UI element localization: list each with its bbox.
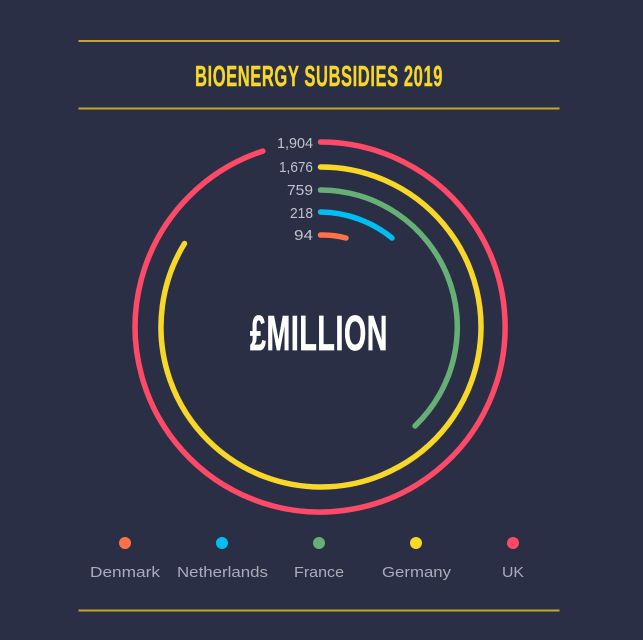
arc: Germany <box>161 167 481 487</box>
legend item: France <box>294 537 344 581</box>
arc: UK <box>135 142 505 512</box>
arc: Netherlands <box>320 212 392 238</box>
legend item: Germany <box>382 537 452 581</box>
value: Netherlands: 218 <box>290 205 313 222</box>
legend item: UK: UK <box>502 564 524 581</box>
value: Germany: 1,676 <box>279 159 313 176</box>
arc: France <box>320 190 457 426</box>
legend item: Netherlands <box>177 537 268 581</box>
legend item: Denmark: Denmark <box>90 564 161 581</box>
legend item: France: France <box>294 564 344 581</box>
title: BIOENERGY SUBSIDIES 2019 <box>195 61 443 93</box>
legend item: Netherlands: Netherlands <box>177 564 268 581</box>
value: UK: 1,904 <box>277 135 313 152</box>
value: France: 759 <box>287 182 313 199</box>
legend <box>90 537 524 581</box>
value: Denmark: 94 <box>294 227 313 244</box>
legend item: UK <box>502 537 524 581</box>
radial bar chart <box>135 142 505 512</box>
value labels <box>277 135 313 244</box>
arc: Denmark <box>320 235 346 238</box>
legend item: Denmark <box>90 537 161 581</box>
legend item: Germany: Germany <box>382 564 452 581</box>
centre label: £MILLION <box>250 307 388 361</box>
